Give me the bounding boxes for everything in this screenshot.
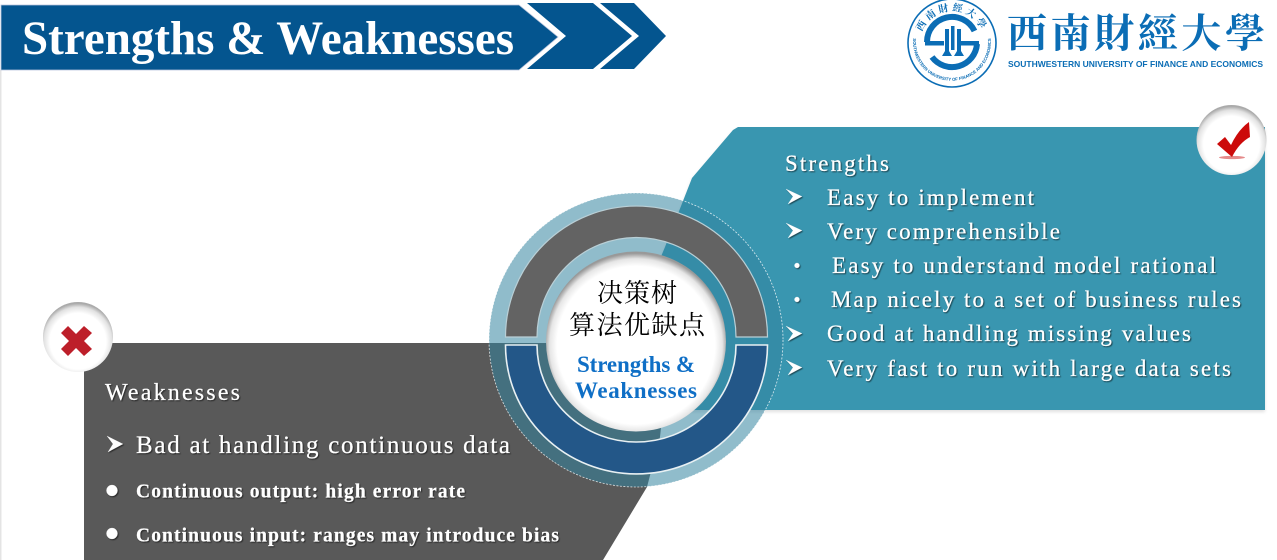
weaknesses list	[105, 380, 559, 546]
central circle diagram	[489, 193, 783, 487]
university seal: 西南財經大學	[915, 2, 987, 32]
round bullets	[795, 263, 800, 302]
center english heading: Weaknesses	[575, 378, 697, 403]
center chinese heading: 决策树	[597, 279, 677, 308]
university name english: SOUTHWESTERN UNIVERSITY OF FINANCE AND ECONOMICS	[1008, 59, 1263, 69]
center chinese heading	[569, 279, 706, 340]
center english heading	[575, 352, 697, 403]
university logo	[907, 0, 1265, 88]
weakness sub items: Continuous input: ranges may introduce bias	[136, 526, 559, 546]
translucent outer disc	[489, 193, 783, 487]
center chinese heading: 算法优缺点	[569, 311, 706, 340]
arrow bullets	[786, 189, 802, 375]
upper gray arc	[506, 206, 768, 337]
arrow bullet	[107, 436, 123, 452]
strength items	[827, 185, 1241, 381]
strength items: Good at handling missing values	[827, 321, 1191, 346]
strength items: Very fast to run with large data sets	[827, 356, 1231, 381]
strength items: Easy to implement	[827, 185, 1035, 210]
banner arrow body	[1, 5, 558, 70]
icon: check mark	[1196, 105, 1266, 175]
center white ball	[546, 252, 726, 432]
center english heading: Strengths &	[577, 352, 695, 377]
panel: strengths background	[597, 127, 1265, 410]
panel: weaknesses background	[84, 343, 670, 560]
round bullets	[106, 485, 118, 539]
strength items: Very comprehensible	[827, 219, 1060, 244]
banner chevron 2	[600, 3, 666, 69]
strength items: Map nicely to a set of business rules	[831, 287, 1241, 312]
weakness sub items	[136, 482, 559, 546]
title: Strengths & Weaknesses	[22, 12, 514, 65]
university name chinese: 西南財經大學	[1007, 11, 1265, 56]
weakness main item: Bad at handling continuous data	[136, 432, 510, 459]
title banner	[1, 3, 666, 70]
strength items: Easy to understand model rational	[832, 253, 1216, 278]
weaknesses heading: Weaknesses	[105, 380, 240, 406]
lower blue arc	[506, 345, 768, 474]
dashed outline	[489, 193, 783, 487]
strengths heading: Strengths	[785, 151, 889, 176]
icon: cross mark	[43, 302, 113, 372]
university seal: SOUTHWESTERN UNIVERSITY OF FINANCE AND ECONOMICS	[913, 38, 991, 81]
weakness sub items: Continuous output: high error rate	[136, 482, 465, 502]
strengths list	[785, 151, 1241, 381]
banner chevron 1	[527, 3, 632, 69]
university seal	[907, 0, 997, 88]
